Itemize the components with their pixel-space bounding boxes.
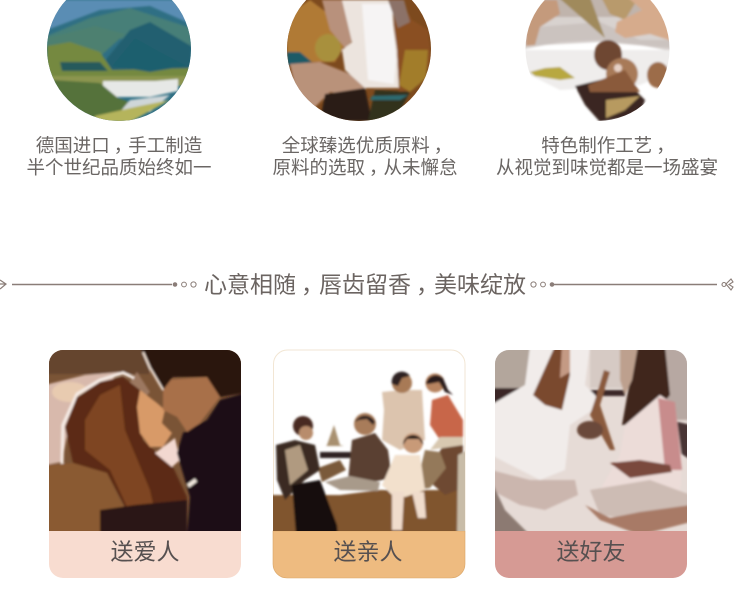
caption: selected ingredients [272, 135, 458, 178]
photo: friends sharing dessert [491, 346, 691, 535]
caption: German import [26, 135, 212, 178]
caption: craftsmanship [496, 135, 718, 178]
card outline [274, 350, 465, 531]
photo: cocoa pod [287, 0, 431, 121]
label band [273, 531, 465, 578]
card: for friends [491, 346, 691, 578]
caption: selected ingredients: 全球臻选优质原料， [282, 135, 452, 156]
label text: 送爱人 [110, 538, 180, 564]
label text: 送好友 [556, 538, 626, 564]
ornament: left divider [0, 280, 196, 289]
photo: chocolate making [520, 0, 675, 122]
photo: family on sofa [270, 372, 468, 535]
card: for family [270, 350, 468, 578]
caption: German import: 半个世纪品质始终如一 [26, 157, 212, 178]
label band [495, 531, 687, 578]
ornament: right divider [531, 279, 733, 290]
caption: German import: 德国进口，手工制造 [36, 135, 202, 156]
photo: couple kissing [45, 346, 245, 535]
caption: craftsmanship: 特色制作工艺， [541, 135, 675, 156]
label band [49, 531, 241, 578]
card: for a loved one [45, 346, 245, 578]
photo: alpine valley [47, 0, 191, 122]
panel: selected ingredients [272, 0, 458, 178]
caption: craftsmanship: 从视觉到味觉都是一场盛宴 [496, 157, 718, 178]
label text: 送亲人 [334, 538, 402, 564]
panel: German import [26, 0, 212, 178]
section heading with ornaments [0, 272, 733, 298]
caption: selected ingredients: 原料的选取，从未懈怠 [272, 157, 458, 178]
panel: craftsmanship [496, 0, 718, 178]
heading text: 心意相随，唇齿留香，美味绽放 [204, 272, 526, 298]
